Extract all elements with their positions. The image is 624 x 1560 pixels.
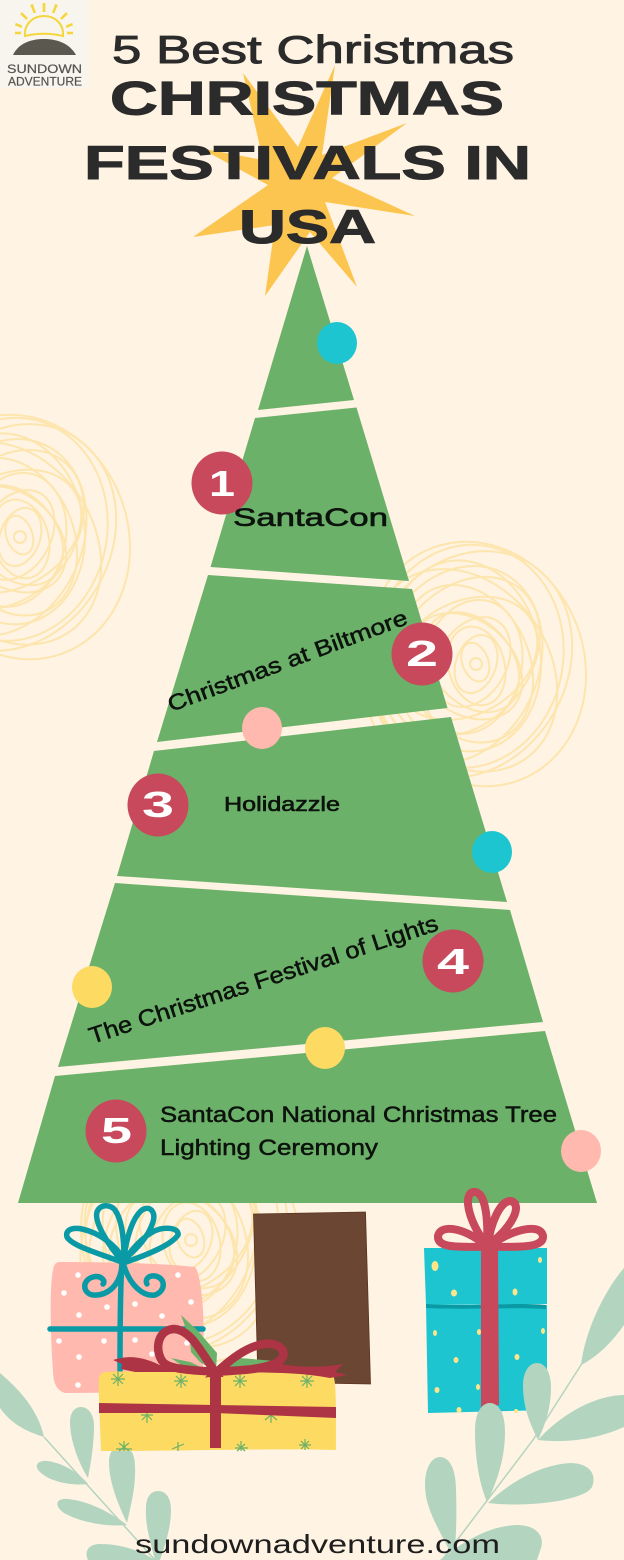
badge 2: 2 [406, 633, 438, 674]
ornament: yellow left [72, 966, 112, 1008]
badge 4 [422, 930, 484, 992]
background scribble: bottom [40, 1087, 335, 1393]
badge 5 [86, 1100, 146, 1162]
background scribble: left [0, 384, 164, 690]
ornament: pink right [561, 1130, 601, 1172]
background scribble: right [325, 511, 620, 817]
badge 3: 3 [142, 784, 174, 825]
festival 3 label: Holidazzle [224, 794, 340, 816]
festival 4 label: The Christmas Festival of Lights [85, 910, 441, 1049]
badge 1: 1 [209, 463, 235, 504]
badge 5: 5 [101, 1110, 132, 1151]
festival 5 label [160, 1102, 557, 1160]
festival 1 label: SantaCon [233, 504, 388, 532]
title: CHRISTMAS [110, 72, 504, 124]
badge 3 [128, 774, 188, 836]
foliage: right branch [425, 1268, 624, 1560]
badge 4: 4 [437, 941, 469, 982]
foliage: left branch [0, 1373, 171, 1560]
badge 1 [192, 452, 252, 514]
gift: pink [50, 1206, 204, 1393]
logo: Sundown Adventure: ADVENTURE [8, 76, 82, 88]
gift: brown box [254, 1212, 370, 1384]
ornament: teal top [317, 322, 357, 364]
title: USA [239, 200, 376, 253]
festival 5 label: SantaCon National Christmas Tree [160, 1102, 557, 1127]
star tree topper [193, 65, 415, 296]
logo: Sundown Adventure [0, 0, 89, 88]
title: 5 Best Christmas [112, 29, 514, 72]
ornament: pink [242, 707, 282, 749]
christmas tree [18, 246, 597, 1203]
badge 2 [392, 622, 452, 686]
gift: yellow with red bow [99, 1315, 347, 1451]
title [84, 29, 531, 253]
gift: blue with red bow [424, 1192, 547, 1413]
logo: Sundown Adventure: SUNDOWN [7, 62, 82, 76]
festival 5 label: Lighting Ceremony [160, 1135, 379, 1160]
ornament: teal right [472, 831, 512, 873]
ornament: yellow centre [305, 1027, 345, 1069]
footer website: sundownadventure.com [135, 1529, 500, 1559]
festival 2 label: Christmas at Biltmore [164, 605, 411, 717]
title: FESTIVALS IN [84, 136, 531, 189]
